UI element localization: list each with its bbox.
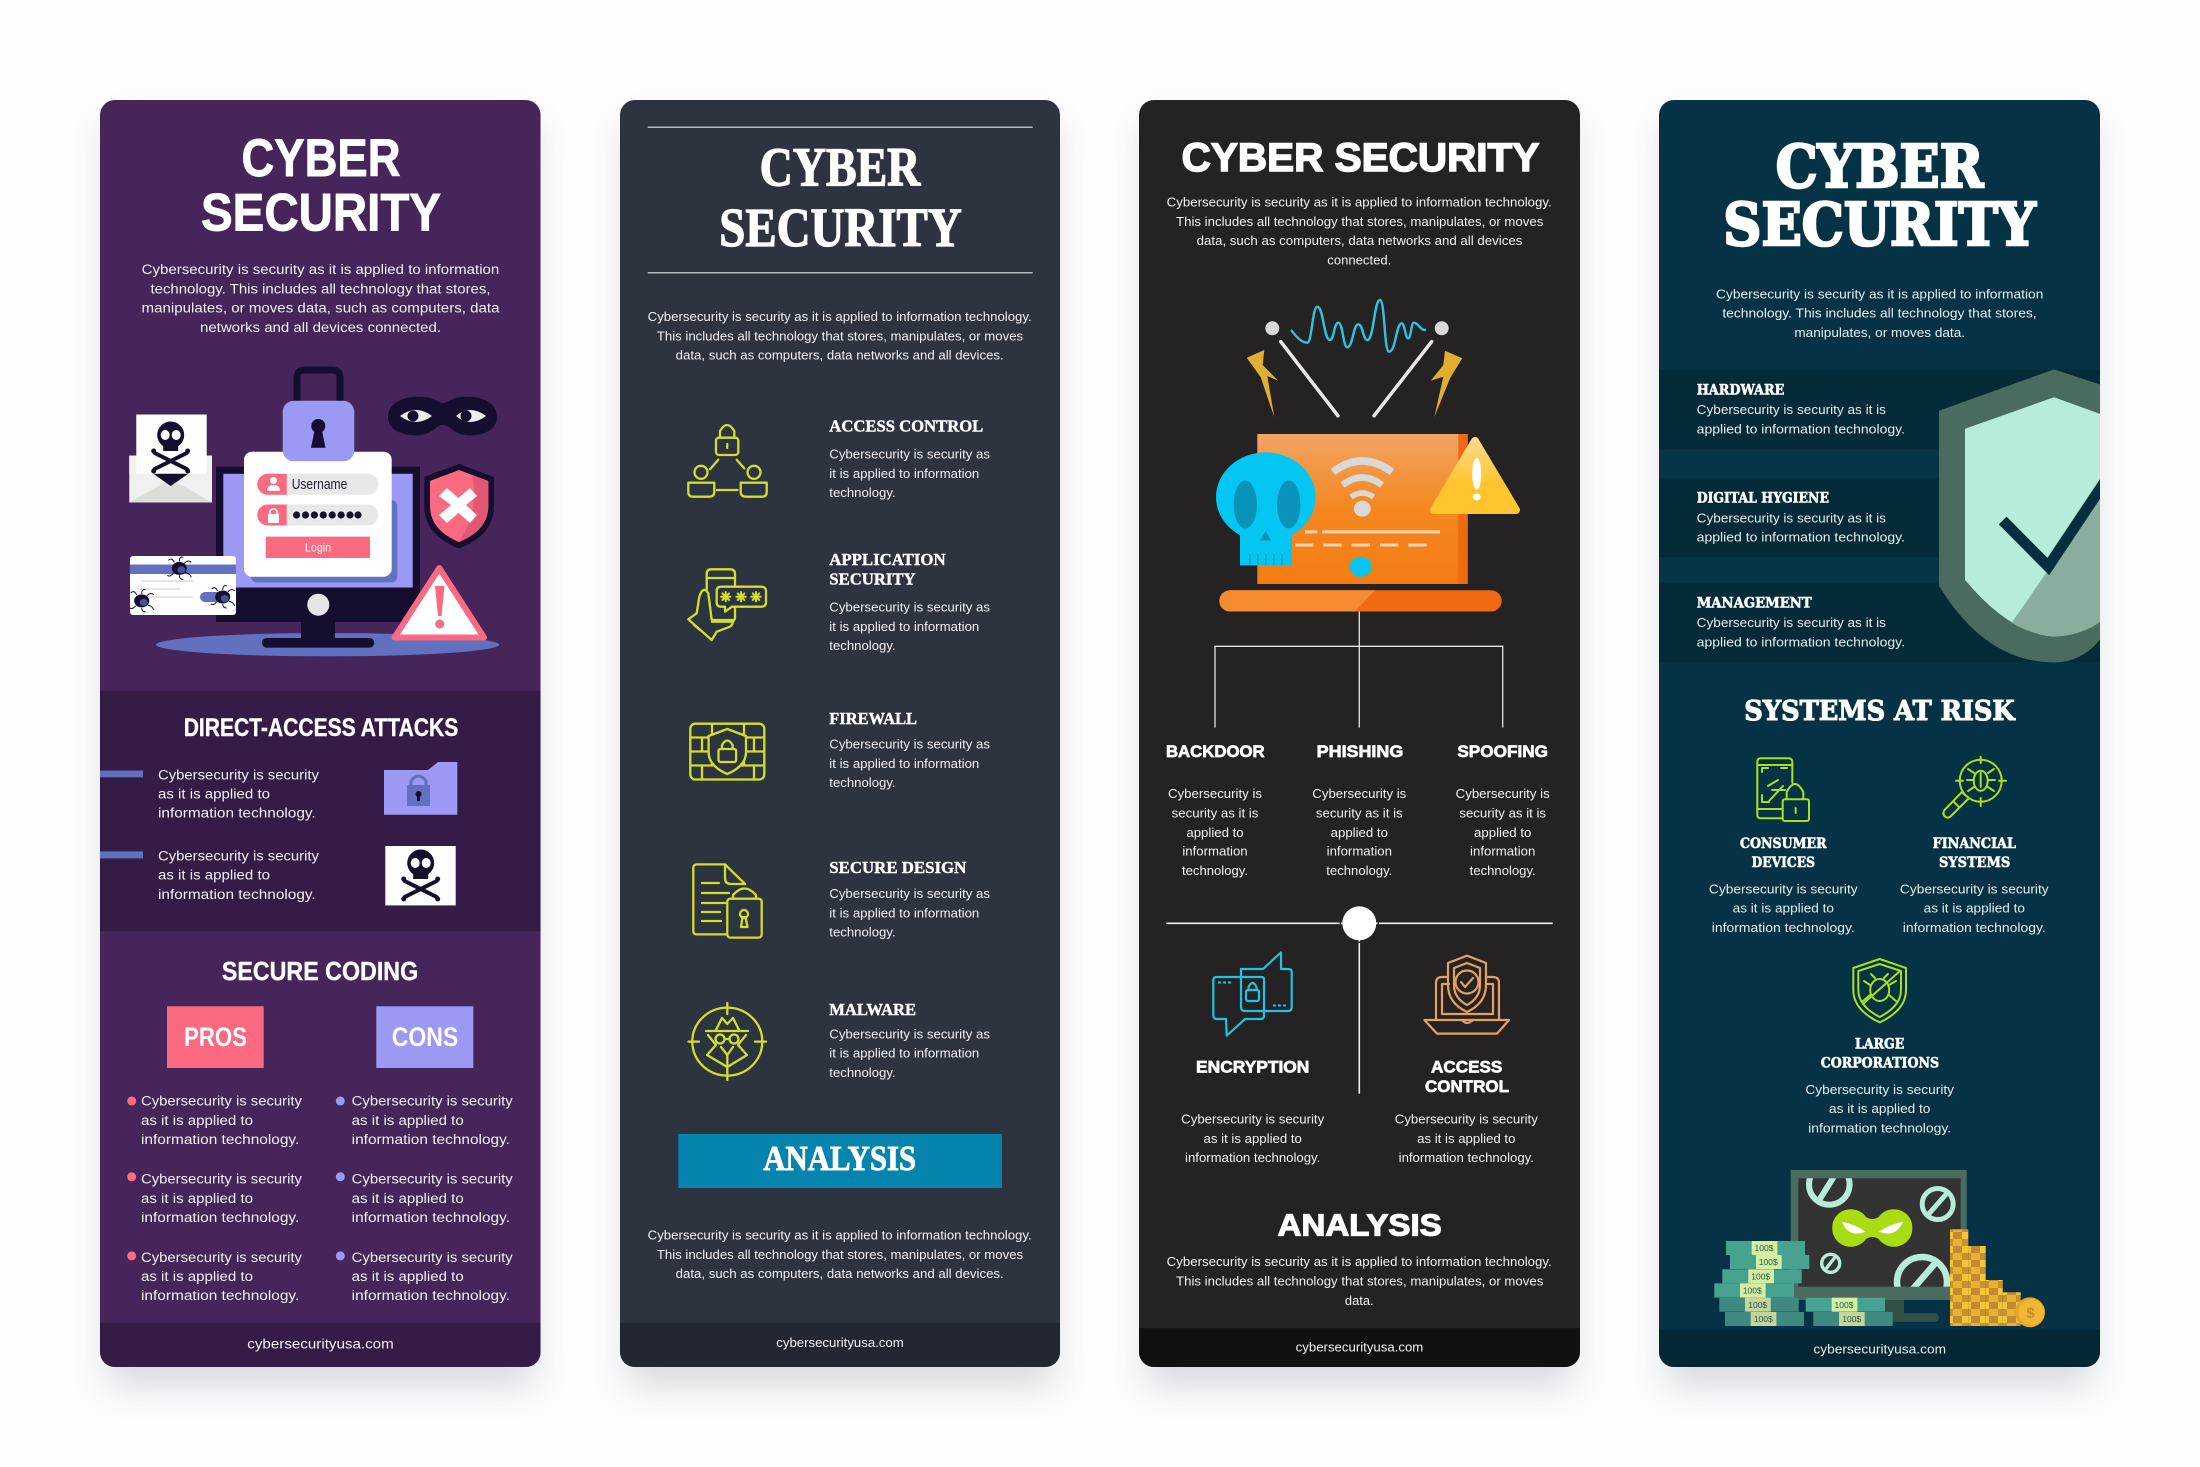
icon: warning triangle bbox=[394, 568, 484, 638]
title: cyber security purple: CYBER bbox=[242, 129, 400, 188]
footer: black bbox=[1139, 1328, 1580, 1368]
illustration: login security bbox=[129, 370, 499, 656]
item: digital hygiene: DIGITAL HYGIENE bbox=[1697, 490, 1829, 506]
intro text: This includes all technology that stores, manipulates, or moves bbox=[1176, 215, 1543, 229]
item: malware bbox=[688, 1000, 990, 1080]
gold coin: $ bbox=[2026, 1305, 2035, 1322]
item: consumer devices: information technology. bbox=[1712, 921, 1855, 935]
analysis text: This includes all technology that stores, manipulates, or moves bbox=[657, 1248, 1023, 1262]
money stacks: 100$ bbox=[1842, 1314, 1861, 1324]
icon: computer monitor bbox=[216, 467, 420, 648]
title: cyber security purple bbox=[202, 138, 441, 232]
analysis text: Cybersecurity is security as it is applied to information technology. bbox=[648, 1228, 1032, 1242]
column: phishing: applied to bbox=[1331, 826, 1388, 840]
item: access control: Cybersecurity is security as bbox=[829, 447, 990, 461]
section: direct-access attacks bbox=[100, 691, 541, 931]
column: spoofing: technology. bbox=[1470, 864, 1536, 878]
analysis text: data, such as computers, data networks and all devices. bbox=[676, 1267, 1004, 1281]
column: encryption: ENCRYPTION bbox=[1196, 1058, 1309, 1077]
item: hardware: applied to information technology. bbox=[1697, 423, 1905, 437]
item: firewall: technology. bbox=[829, 776, 896, 790]
item: consumer devices: CONSUMER bbox=[1740, 836, 1827, 852]
title: cyber security slate bbox=[721, 148, 962, 248]
analysis text: Cybersecurity is security as it is applied to information technology. bbox=[1167, 1255, 1552, 1269]
list: pros bbox=[127, 1094, 302, 1303]
column: phishing: information bbox=[1327, 845, 1392, 859]
intro text: Cybersecurity is security as it is applied to information bbox=[142, 262, 499, 277]
title: cyber security slate: CYBER bbox=[760, 136, 921, 197]
icon: access control network bbox=[688, 425, 767, 497]
list: cons: Cybersecurity is security bbox=[352, 1250, 513, 1265]
title: cyber security slate: SECURITY bbox=[719, 197, 962, 258]
intro text bbox=[1167, 196, 1552, 267]
icon: padlock bbox=[297, 370, 340, 405]
column: backdoor: information bbox=[1182, 845, 1248, 859]
item: financial systems: Cybersecurity is security bbox=[1900, 883, 2049, 897]
list: pros: as it is applied to bbox=[141, 1113, 253, 1128]
column: backdoor: Cybersecurity is bbox=[1168, 787, 1262, 801]
item: application security bbox=[688, 550, 990, 653]
icon: skull tile bbox=[385, 846, 456, 905]
icon: bug magnifier bbox=[1943, 757, 2006, 818]
panel: slate infographic bbox=[620, 100, 1060, 1368]
column: phishing: PHISHING bbox=[1317, 742, 1403, 761]
money stacks bbox=[1714, 1241, 1893, 1326]
item: firewall: FIREWALL bbox=[829, 709, 917, 728]
list: cons: as it is applied to bbox=[352, 1269, 464, 1284]
item: malware: MALWARE bbox=[829, 1000, 916, 1019]
intro text: manipulates, or moves data, such as computers, data bbox=[142, 301, 500, 316]
icon: bandit mask bbox=[388, 397, 497, 435]
banner: analysis: ANALYSIS bbox=[763, 1139, 916, 1178]
monitor bbox=[1791, 1164, 1967, 1322]
column: spoofing: Cybersecurity is bbox=[1456, 787, 1550, 801]
list: pros: Cybersecurity is security bbox=[141, 1094, 302, 1109]
list: pros: information technology. bbox=[141, 1132, 299, 1147]
item: financial systems: FINANCIAL bbox=[1933, 836, 2016, 852]
item: consumer devices: as it is applied to bbox=[1733, 902, 1834, 916]
footer: slate: cybersecurityusa.com bbox=[776, 1336, 904, 1350]
connector lines bbox=[1215, 612, 1503, 728]
icon: phone password hand bbox=[688, 569, 766, 640]
item: digital hygiene: Cybersecurity is security as it is bbox=[1697, 512, 1886, 526]
column: access control: CONTROL bbox=[1425, 1077, 1509, 1096]
item: large corporations: as it is applied to bbox=[1829, 1102, 1930, 1116]
heading: secure coding: SECURE CODING bbox=[222, 956, 418, 986]
icon: locked document bbox=[693, 864, 762, 938]
column: access control: as it is applied to bbox=[1417, 1132, 1516, 1146]
money stacks: 100$ bbox=[1755, 1243, 1774, 1253]
column: spoofing: applied to bbox=[1474, 826, 1531, 840]
pros badge bbox=[167, 1006, 264, 1068]
list: cons: Cybersecurity is security bbox=[352, 1094, 513, 1109]
footer: black: cybersecurityusa.com bbox=[1296, 1340, 1423, 1354]
column: backdoor: applied to bbox=[1186, 826, 1244, 840]
item: firewall: it is applied to information bbox=[829, 757, 979, 771]
item: large corporations: LARGE bbox=[1855, 1037, 1904, 1053]
item: large corporations bbox=[1805, 959, 1955, 1135]
antennae bbox=[1265, 321, 1449, 416]
column: access control: Cybersecurity is security bbox=[1395, 1112, 1539, 1126]
cons badge: CONS bbox=[392, 1022, 458, 1052]
column: phishing: Cybersecurity is bbox=[1312, 787, 1406, 801]
money stacks: 100$ bbox=[1754, 1314, 1773, 1324]
panel: teal infographic bbox=[1659, 100, 2120, 1368]
icon: encrypted chat bbox=[1213, 952, 1292, 1036]
column: access control: ACCESS bbox=[1431, 1058, 1502, 1077]
icon: envelope with skull bbox=[129, 414, 212, 502]
item: secure design: it is applied to information bbox=[829, 906, 979, 920]
icon: spy target bbox=[688, 1003, 766, 1080]
item: firewall: Cybersecurity is security as bbox=[829, 738, 990, 752]
title: cyber security teal: SECURITY bbox=[1723, 190, 2036, 259]
column: phishing: technology. bbox=[1326, 864, 1392, 878]
intro text bbox=[1716, 288, 2043, 340]
text: attack two bbox=[158, 849, 319, 902]
login form: Login bbox=[305, 542, 331, 554]
icon: firewall bbox=[690, 724, 764, 780]
item: large corporations: CORPORATIONS bbox=[1821, 1056, 1939, 1072]
intro text: technology. This includes all technology that stores, bbox=[150, 282, 490, 297]
text: attack two: Cybersecurity is security bbox=[158, 849, 319, 864]
heading: direct-access attacks: DIRECT-ACCESS ATTACKS bbox=[184, 714, 458, 742]
icon: shield with x bbox=[424, 464, 494, 548]
list: pros: Cybersecurity is security bbox=[141, 1172, 302, 1187]
item: malware: Cybersecurity is security as bbox=[829, 1027, 990, 1041]
column: backdoor: BACKDOOR bbox=[1166, 742, 1265, 761]
text: attack two: information technology. bbox=[158, 887, 316, 902]
list: cons: information technology. bbox=[352, 1288, 510, 1303]
list: pros: as it is applied to bbox=[141, 1269, 253, 1284]
column: backdoor: security as it is bbox=[1172, 806, 1258, 820]
divider with node bbox=[1166, 904, 1553, 1094]
illustration: hacked monitor and money bbox=[1714, 1164, 2045, 1327]
intro text: data, such as computers, data networks and all devices bbox=[1197, 234, 1522, 248]
title: cyber security teal bbox=[1723, 132, 2036, 259]
column: backdoor bbox=[1166, 742, 1265, 878]
intro text: networks and all devices connected. bbox=[200, 320, 441, 335]
item: secure design bbox=[693, 858, 990, 940]
banner: analysis bbox=[678, 1134, 1002, 1188]
item: application security: Cybersecurity is security as bbox=[829, 601, 990, 615]
column: access control bbox=[1395, 956, 1539, 1165]
panel: purple infographic bbox=[100, 100, 541, 1368]
analysis text: This includes all technology that stores, manipulates, or moves bbox=[1176, 1274, 1543, 1288]
card shadows bbox=[108, 125, 2092, 1385]
intro text: Cybersecurity is security as it is applied to information bbox=[1716, 288, 2043, 302]
column: encryption bbox=[1181, 952, 1325, 1165]
title: cyber security black: CYBER SECURITY bbox=[1182, 136, 1540, 180]
item: application security: technology. bbox=[829, 639, 896, 653]
intro text: Cybersecurity is security as it is applied to information technology. bbox=[1167, 196, 1552, 210]
bands bbox=[1659, 369, 2100, 662]
footer: purple: cybersecurityusa.com bbox=[247, 1337, 394, 1352]
column: encryption: as it is applied to bbox=[1204, 1132, 1302, 1146]
intro text: technology. This includes all technology that stores, bbox=[1722, 307, 2037, 321]
list: cons: information technology. bbox=[352, 1210, 510, 1225]
item: management: applied to information technology. bbox=[1697, 636, 1905, 650]
item: large corporations: Cybersecurity is security bbox=[1805, 1083, 1955, 1097]
item: management bbox=[1697, 595, 1905, 650]
column: encryption: information technology. bbox=[1185, 1151, 1320, 1165]
footer: slate bbox=[620, 1323, 1060, 1368]
login form bbox=[244, 401, 392, 577]
signal wave bbox=[1292, 300, 1425, 352]
list: pros: information technology. bbox=[141, 1288, 299, 1303]
item: hardware: HARDWARE bbox=[1697, 383, 1784, 399]
coin stacks bbox=[1950, 1229, 2021, 1326]
text: attack one: information technology. bbox=[158, 806, 316, 821]
item: financial systems: as it is applied to bbox=[1924, 902, 2025, 916]
heading: systems at risk: SYSTEMS AT RISK bbox=[1744, 696, 2016, 727]
item: access control: it is applied to information bbox=[829, 467, 979, 481]
item: financial systems: SYSTEMS bbox=[1939, 855, 2010, 871]
intro text bbox=[648, 310, 1032, 362]
item: secure design: technology. bbox=[829, 926, 896, 940]
list: cons: information technology. bbox=[352, 1132, 510, 1147]
analysis text bbox=[1167, 1255, 1552, 1308]
item: application security: APPLICATION bbox=[829, 550, 946, 569]
pros badge: PROS bbox=[184, 1022, 247, 1052]
list: pros: Cybersecurity is security bbox=[141, 1250, 302, 1265]
icon: phone with lock bbox=[1757, 758, 1809, 821]
intro text: This includes all technology that stores, manipulates, or moves bbox=[657, 329, 1023, 343]
item: application security: it is applied to information bbox=[829, 620, 979, 634]
item: hardware: Cybersecurity is security as it is bbox=[1697, 403, 1886, 417]
intro text: data, such as computers, data networks and all devices. bbox=[676, 348, 1004, 362]
list: pros: information technology. bbox=[141, 1210, 299, 1225]
icon: warning triangle bbox=[1434, 441, 1516, 510]
footer: purple bbox=[100, 1323, 541, 1368]
item: malware: technology. bbox=[829, 1066, 896, 1080]
list: cons bbox=[336, 1094, 513, 1303]
item: firewall bbox=[690, 709, 990, 790]
icon: shield with check bbox=[1939, 369, 2120, 662]
text: attack one bbox=[158, 768, 319, 821]
title: cyber security teal: CYBER bbox=[1776, 132, 1984, 201]
item: hardware bbox=[1697, 383, 1905, 437]
analysis text bbox=[648, 1228, 1032, 1281]
column: spoofing: information bbox=[1470, 845, 1535, 859]
intro text bbox=[142, 262, 500, 335]
icon: locked folder bbox=[384, 762, 457, 815]
money stacks: 100$ bbox=[1759, 1257, 1778, 1267]
item: malware: it is applied to information bbox=[829, 1047, 979, 1061]
text: attack two: as it is applied to bbox=[158, 868, 270, 883]
money stacks: 100$ bbox=[1748, 1300, 1767, 1310]
item: access control: ACCESS CONTROL bbox=[829, 417, 983, 436]
item: digital hygiene bbox=[1697, 490, 1905, 545]
text: attack one: as it is applied to bbox=[158, 787, 270, 802]
login form: Username bbox=[292, 477, 347, 493]
item: consumer devices: DEVICES bbox=[1752, 855, 1815, 871]
item: consumer devices: Cybersecurity is security bbox=[1709, 883, 1858, 897]
item: secure design: Cybersecurity is security as bbox=[829, 887, 990, 901]
column: access control: information technology. bbox=[1399, 1151, 1534, 1165]
money stacks: 100$ bbox=[1743, 1286, 1762, 1296]
icon: shield laptop bbox=[1424, 956, 1509, 1034]
money stacks: 100$ bbox=[1835, 1300, 1854, 1310]
item: management: MANAGEMENT bbox=[1697, 595, 1812, 611]
list: cons: as it is applied to bbox=[352, 1113, 464, 1128]
list: cons: as it is applied to bbox=[352, 1191, 464, 1206]
intro text: Cybersecurity is security as it is applied to information technology. bbox=[648, 310, 1032, 324]
item: consumer devices bbox=[1709, 758, 1858, 935]
title: cyber security purple: SECURITY bbox=[201, 184, 441, 242]
list: cons: Cybersecurity is security bbox=[352, 1172, 513, 1187]
column: spoofing bbox=[1456, 742, 1550, 878]
column: spoofing: SPOOFING bbox=[1457, 742, 1548, 761]
icon: blue skull bbox=[1216, 452, 1316, 565]
intro text: manipulates, or moves data. bbox=[1794, 326, 1965, 340]
footer: teal: cybersecurityusa.com bbox=[1813, 1343, 1946, 1357]
column: phishing: security as it is bbox=[1316, 806, 1403, 820]
item: secure design: SECURE DESIGN bbox=[829, 858, 967, 877]
heading: analysis: ANALYSIS bbox=[1278, 1208, 1442, 1243]
money stacks: 100$ bbox=[1751, 1271, 1770, 1281]
lightning bolts bbox=[1247, 350, 1462, 417]
item: financial systems bbox=[1900, 757, 2049, 935]
panel: black infographic bbox=[1139, 100, 1580, 1368]
item: large corporations: information technology. bbox=[1808, 1121, 1951, 1135]
list: pros: as it is applied to bbox=[141, 1191, 253, 1206]
illustration: hacked laptop bbox=[1216, 300, 1516, 612]
item: access control bbox=[688, 417, 990, 500]
column: backdoor: technology. bbox=[1182, 864, 1248, 878]
icon: shield bug blocked bbox=[1853, 959, 1906, 1022]
item: financial systems: information technology. bbox=[1903, 921, 2046, 935]
analysis text: data. bbox=[1345, 1294, 1374, 1308]
item: digital hygiene: applied to information technology. bbox=[1697, 531, 1905, 545]
column: phishing bbox=[1312, 742, 1406, 878]
gold coin bbox=[2015, 1297, 2045, 1327]
laptop bbox=[1219, 434, 1502, 612]
column: encryption: Cybersecurity is security bbox=[1181, 1112, 1325, 1126]
footer: teal bbox=[1659, 1330, 2100, 1368]
icon: infected credit card bbox=[130, 556, 236, 615]
item: application security: SECURITY bbox=[829, 569, 916, 588]
column: spoofing: security as it is bbox=[1459, 806, 1546, 820]
cons badge bbox=[376, 1006, 473, 1068]
item: access control: technology. bbox=[829, 486, 896, 500]
item: management: Cybersecurity is security as it is bbox=[1697, 616, 1886, 630]
intro text: connected. bbox=[1327, 253, 1391, 267]
text: attack one: Cybersecurity is security bbox=[158, 768, 319, 783]
